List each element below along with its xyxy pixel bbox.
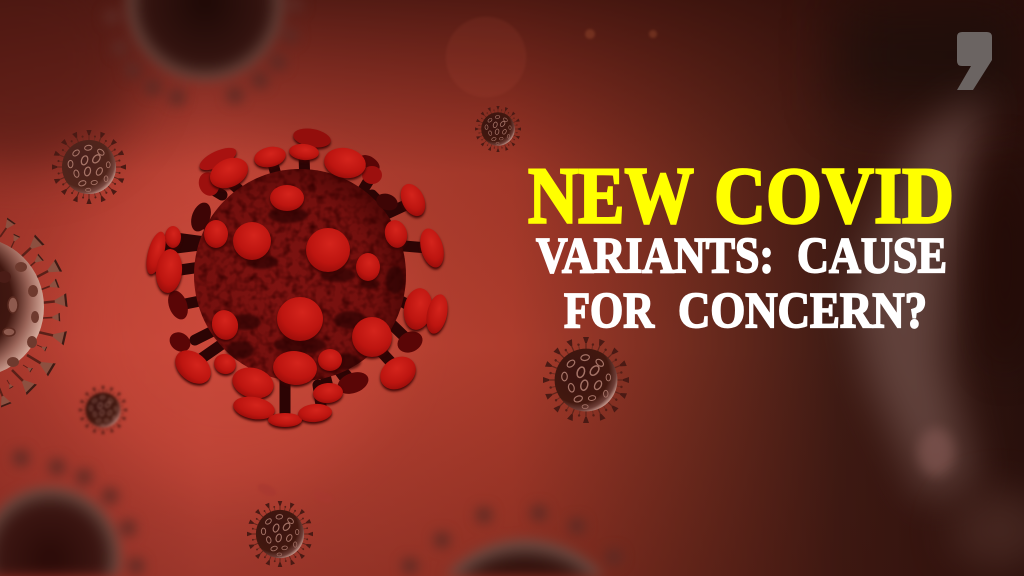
blurred small virus: left xyxy=(79,386,127,434)
headline line 3 xyxy=(564,284,927,340)
main red virus xyxy=(143,126,451,427)
headline line 2: CAUSE xyxy=(797,228,947,284)
virus: bottom centre small xyxy=(247,501,313,567)
blurred virus: bottom centre xyxy=(402,505,622,576)
headline line 1: NEW xyxy=(528,152,694,240)
headline line 1 xyxy=(528,152,954,240)
large virus: far left edge xyxy=(0,218,68,408)
virus: lower centre right xyxy=(543,337,629,423)
virus: upper left xyxy=(52,130,126,204)
blurred virus: top xyxy=(104,0,303,105)
logo: comma mark xyxy=(957,32,992,90)
headline line 2 xyxy=(536,228,947,284)
headline xyxy=(528,152,954,340)
headline line 3: FOR xyxy=(564,284,655,340)
body shadows under caps xyxy=(226,207,404,370)
virus body xyxy=(194,169,406,381)
virus stems xyxy=(160,155,428,415)
dark back caps xyxy=(164,152,426,398)
headline line 1: COVID xyxy=(714,152,954,240)
headline line 3: CONCERN? xyxy=(678,284,927,340)
red spike caps xyxy=(143,126,451,427)
virus: top centre xyxy=(475,106,521,152)
blurred virus: bottom left xyxy=(0,450,144,576)
headline line 2: VARIANTS: xyxy=(536,228,774,284)
